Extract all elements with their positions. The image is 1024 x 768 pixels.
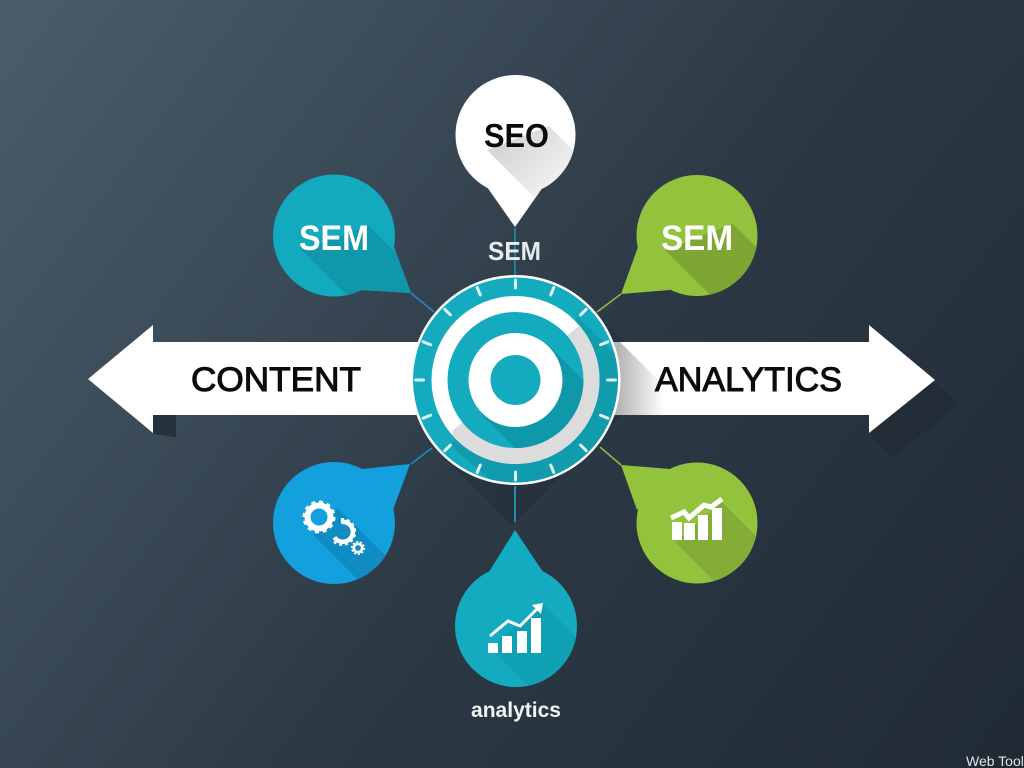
pin: gears [273, 462, 410, 584]
label: SEM: SEM [299, 219, 369, 258]
outer disc [410, 275, 620, 485]
label: content: CONTENT [191, 361, 361, 399]
pin shadow [302, 226, 411, 295]
inner white ring [468, 333, 562, 427]
icon: bar chart [488, 603, 543, 653]
arrow shadow [153, 415, 176, 437]
outer ring shadow [452, 317, 618, 482]
label: analytics: analytics [471, 699, 561, 722]
tick marks [416, 280, 616, 480]
teal ring shadow [481, 346, 584, 448]
pin shadow [487, 126, 574, 198]
pin shadow [675, 502, 756, 581]
arrow: analytics (right) [605, 325, 958, 458]
label: SEM under pin: SEM [488, 236, 541, 266]
connector lines [411, 228, 621, 522]
pin: SEM teal [273, 174, 411, 296]
icon: gears [304, 502, 364, 554]
white ring shade [452, 326, 600, 464]
shadow from target [612, 342, 664, 415]
target long shadow [441, 306, 660, 525]
pin shadow [313, 508, 386, 580]
pin: SEO [456, 75, 576, 227]
arrow body [605, 325, 935, 433]
pin: SEM green [621, 175, 758, 296]
icon: bar chart [671, 499, 722, 540]
pin shadow [665, 224, 756, 295]
white ring [432, 296, 600, 464]
arrow body [88, 325, 425, 433]
bullseye [490, 355, 540, 405]
pin: analytics teal [455, 530, 577, 687]
target [413, 275, 620, 485]
teal ring [448, 312, 584, 448]
pin shadow [496, 604, 576, 686]
arrow shadow [869, 380, 958, 458]
arrow: content (left) [88, 325, 425, 437]
label: SEO: SEO [484, 117, 549, 154]
label: analytics: ANALYTICS [655, 361, 842, 399]
pin: chart green [621, 462, 758, 584]
label: SEM: SEM [661, 219, 733, 258]
